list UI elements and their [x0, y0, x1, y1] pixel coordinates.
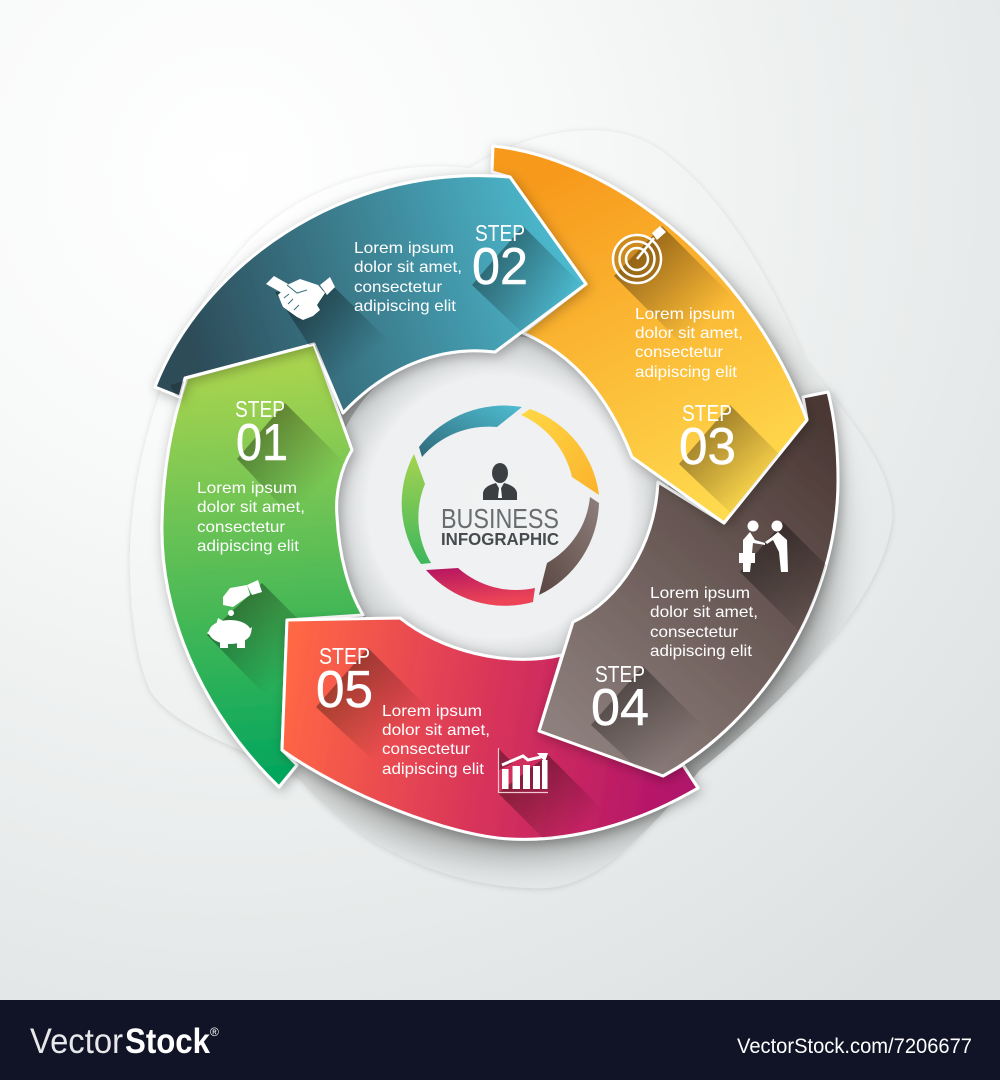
step 4 text — [650, 585, 758, 660]
step 3 label: 03 — [679, 418, 736, 476]
step 5 text — [382, 703, 490, 778]
step 1 label: 01 — [236, 414, 288, 472]
long shadows step 5 — [316, 648, 596, 838]
step 1 label — [235, 396, 288, 472]
step 4 text: Lorem ipsum — [650, 585, 750, 602]
icon: two people shaking hands — [739, 520, 788, 572]
mini arrow teal — [419, 406, 522, 457]
step 1 label: STEP — [235, 396, 285, 422]
step 3 text: adipiscing elit — [635, 364, 738, 381]
step 4 text: dolor sit amet, — [650, 604, 758, 621]
step 2 text: dolor sit amet, — [354, 259, 462, 276]
step 4 text: consectetur — [650, 624, 739, 641]
mini arrow red — [426, 568, 535, 606]
panel: step 1 green segment — [162, 344, 363, 787]
footer logo: Stock — [125, 1022, 210, 1061]
footer image id: VectorStock.com/7206677 — [737, 1035, 972, 1058]
mini arrow brown — [539, 497, 599, 595]
centre disc — [326, 335, 670, 679]
panel: step 3 yellow segment — [492, 146, 807, 523]
step 1 text: consectetur — [197, 519, 286, 536]
step 1 text: adipiscing elit — [197, 538, 300, 555]
step 3 text: Lorem ipsum — [635, 306, 735, 323]
step 1 text: Lorem ipsum — [197, 480, 297, 497]
step 3 text — [635, 306, 743, 381]
long shadows step 4 — [591, 522, 826, 770]
title: business: BUSINESS — [441, 503, 559, 534]
step 2 text: adipiscing elit — [354, 298, 457, 315]
footer bar — [0, 1000, 1000, 1080]
long shadows step 3 — [614, 226, 790, 520]
panel: step 5 red segment — [282, 618, 698, 853]
icon: target with dart — [613, 226, 666, 283]
icon: businessman — [483, 463, 517, 500]
long shadows step 1 — [207, 403, 345, 695]
step 1 text — [197, 480, 305, 555]
icon: rising bar chart — [498, 748, 548, 792]
long shadows step 2 — [170, 226, 576, 397]
wheel cast shadow — [291, 258, 856, 878]
step 3 text: dolor sit amet, — [635, 325, 743, 342]
step 2 text: consectetur — [354, 279, 443, 296]
step 5 text: dolor sit amet, — [382, 722, 490, 739]
panel: step 4 brown segment — [539, 392, 858, 780]
step 3 text: consectetur — [635, 344, 724, 361]
step 5 label: STEP — [319, 643, 370, 669]
step 2 text: Lorem ipsum — [354, 240, 454, 257]
step 5 text: consectetur — [382, 741, 471, 758]
step 5 label: 05 — [316, 661, 373, 719]
decorative paper blob behind wheel — [130, 130, 892, 888]
mini arrow yellow — [521, 409, 599, 495]
footer logo: Vector — [30, 1022, 123, 1061]
step 4 label: 04 — [591, 679, 649, 737]
step 2 text — [354, 240, 462, 315]
footer logo — [30, 1022, 219, 1061]
icon: handshake — [266, 276, 335, 320]
step 5 text: Lorem ipsum — [382, 703, 482, 720]
step 3 label: STEP — [682, 400, 732, 426]
footer logo: ® — [210, 1025, 219, 1039]
step 2 label: STEP — [475, 220, 525, 246]
step 1 text: dolor sit amet, — [197, 499, 305, 516]
step 4 label: STEP — [595, 661, 645, 687]
title: infographic: INFOGRAPHIC — [441, 529, 559, 549]
step 2 label: 02 — [472, 238, 528, 296]
step 4 text: adipiscing elit — [650, 643, 753, 660]
mini arrow green — [402, 454, 431, 564]
panel: step 2 teal segment — [155, 176, 586, 440]
centre ring of mini arrows — [402, 406, 599, 606]
icon: piggy bank and hand — [207, 580, 262, 648]
step 5 text: adipiscing elit — [382, 761, 485, 778]
